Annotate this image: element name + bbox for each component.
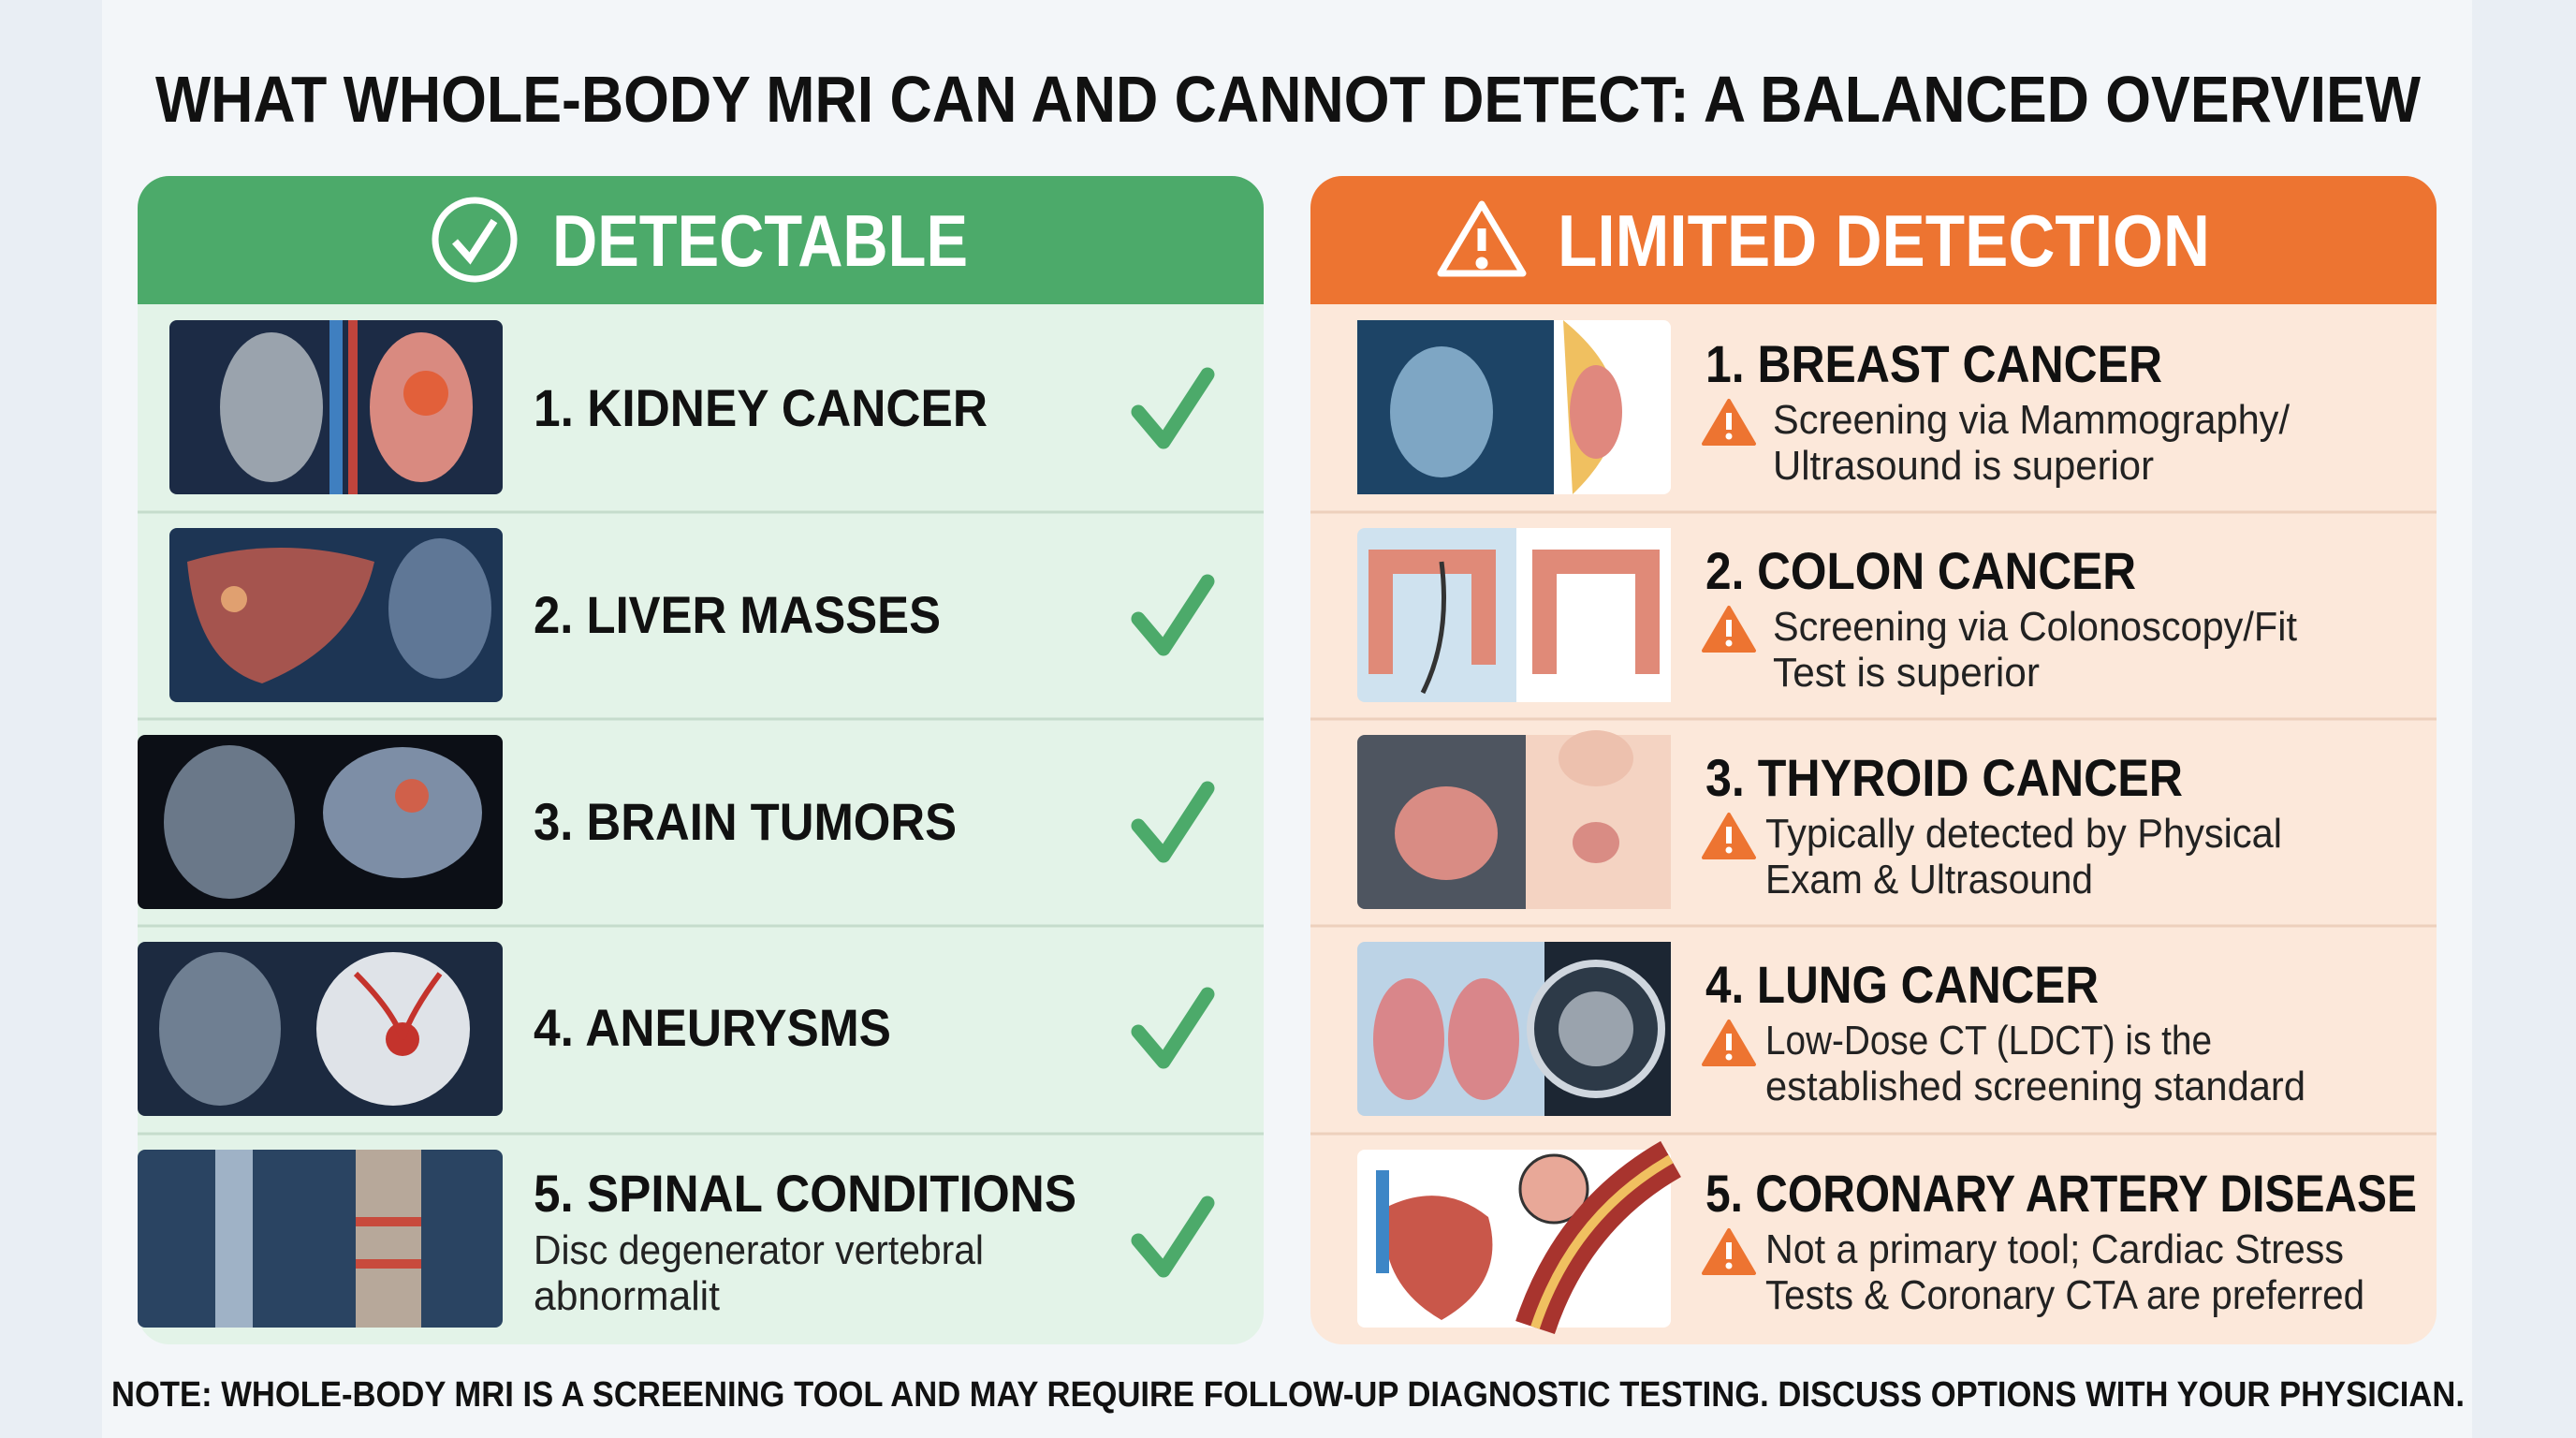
row: spinal conditions: 5. SPINAL CONDITIONS bbox=[534, 1164, 1076, 1223]
panel: limited detection bbox=[1310, 176, 2437, 1344]
text: spinal description bbox=[534, 1227, 984, 1319]
row: thyroid cancer bbox=[1357, 730, 2282, 909]
row: colon cancer: 2. COLON CANCER bbox=[1705, 541, 2136, 600]
text: colon note: Test is superior bbox=[1773, 650, 2040, 696]
icon: check bbox=[1138, 994, 1208, 1062]
row: liver masses bbox=[169, 528, 1208, 702]
image: spine bbox=[138, 1150, 503, 1328]
icon: warning bbox=[1704, 1021, 1754, 1064]
image: colon bbox=[1357, 528, 1671, 702]
text: thyroid note: Typically detected by Physical bbox=[1765, 811, 2282, 857]
text: lung note: Low-Dose CT (LDCT) is the bbox=[1765, 1018, 2212, 1064]
row: breast cancer: 1. BREAST CANCER bbox=[1705, 334, 2162, 393]
icon: check bbox=[1138, 581, 1208, 649]
row: coronary artery disease: 5. CORONARY ARTERY DISEASE bbox=[1705, 1164, 2417, 1223]
text: colon note: Screening via Colonoscopy/Fit bbox=[1773, 604, 2297, 650]
text: breast note bbox=[1773, 397, 2291, 489]
icon: check bbox=[1138, 1203, 1208, 1270]
row: liver masses: 2. LIVER MASSES bbox=[534, 585, 941, 644]
text: coronary note bbox=[1765, 1226, 2364, 1318]
row: kidney cancer bbox=[169, 320, 1208, 494]
icon: check bbox=[1138, 788, 1208, 856]
text: colon note bbox=[1773, 604, 2297, 696]
icon: warning triangle bbox=[1441, 204, 1523, 273]
image: kidneys bbox=[169, 320, 503, 494]
text: lung note: established screening standard bbox=[1765, 1064, 2305, 1109]
text: breast note: Ultrasound is superior bbox=[1773, 443, 2154, 489]
row: spinal conditions bbox=[138, 1150, 1208, 1328]
row: thyroid cancer: 3. THYROID CANCER bbox=[1705, 748, 2183, 807]
header: limited detection bbox=[1310, 176, 2437, 304]
image: aneurysm bbox=[138, 942, 503, 1116]
text: coronary note: Not a primary tool; Cardiac Stress bbox=[1765, 1226, 2344, 1272]
image: heart bbox=[1357, 1150, 1671, 1328]
image: breast bbox=[1357, 320, 1671, 494]
image: brain bbox=[138, 735, 503, 909]
header: detectable bbox=[138, 176, 1264, 304]
row: lung cancer bbox=[1357, 942, 2305, 1116]
row: lung cancer: 4. LUNG CANCER bbox=[1705, 955, 2099, 1014]
icon: warning bbox=[1704, 1230, 1754, 1273]
panel: detectable bbox=[138, 176, 1264, 1344]
image: lungs bbox=[1357, 942, 1671, 1116]
row: coronary artery disease bbox=[1357, 1150, 2417, 1328]
row: brain tumors bbox=[138, 735, 1208, 909]
text: coronary note: Tests & Coronary CTA are preferred bbox=[1765, 1272, 2364, 1318]
text: lung note bbox=[1765, 1018, 2305, 1109]
image: thyroid bbox=[1357, 730, 1671, 909]
row: breast cancer bbox=[1357, 320, 2291, 494]
text: breast note: Screening via Mammography/ bbox=[1773, 397, 2291, 443]
header: detectable: DETECTABLE bbox=[552, 199, 968, 282]
row: kidney cancer: 1. KIDNEY CANCER bbox=[534, 378, 988, 437]
icon: check bbox=[1138, 374, 1208, 442]
row: aneurysms: 4. ANEURYSMS bbox=[534, 998, 891, 1057]
row: colon cancer bbox=[1357, 528, 2297, 702]
row: aneurysms bbox=[138, 942, 1208, 1116]
row: brain tumors: 3. BRAIN TUMORS bbox=[534, 792, 957, 851]
icon: warning bbox=[1704, 401, 1754, 444]
image: liver bbox=[169, 528, 503, 702]
text: spinal description: abnormalit bbox=[534, 1273, 720, 1319]
icon: warning bbox=[1704, 608, 1754, 651]
icon: check circle bbox=[435, 200, 514, 279]
text: spinal description: Disc degenerator vertebral bbox=[534, 1227, 984, 1273]
icon: warning bbox=[1704, 814, 1754, 858]
header: limited detection: LIMITED DETECTION bbox=[1558, 199, 2210, 282]
text: thyroid note bbox=[1765, 811, 2282, 902]
text: thyroid note: Exam & Ultrasound bbox=[1765, 857, 2093, 902]
